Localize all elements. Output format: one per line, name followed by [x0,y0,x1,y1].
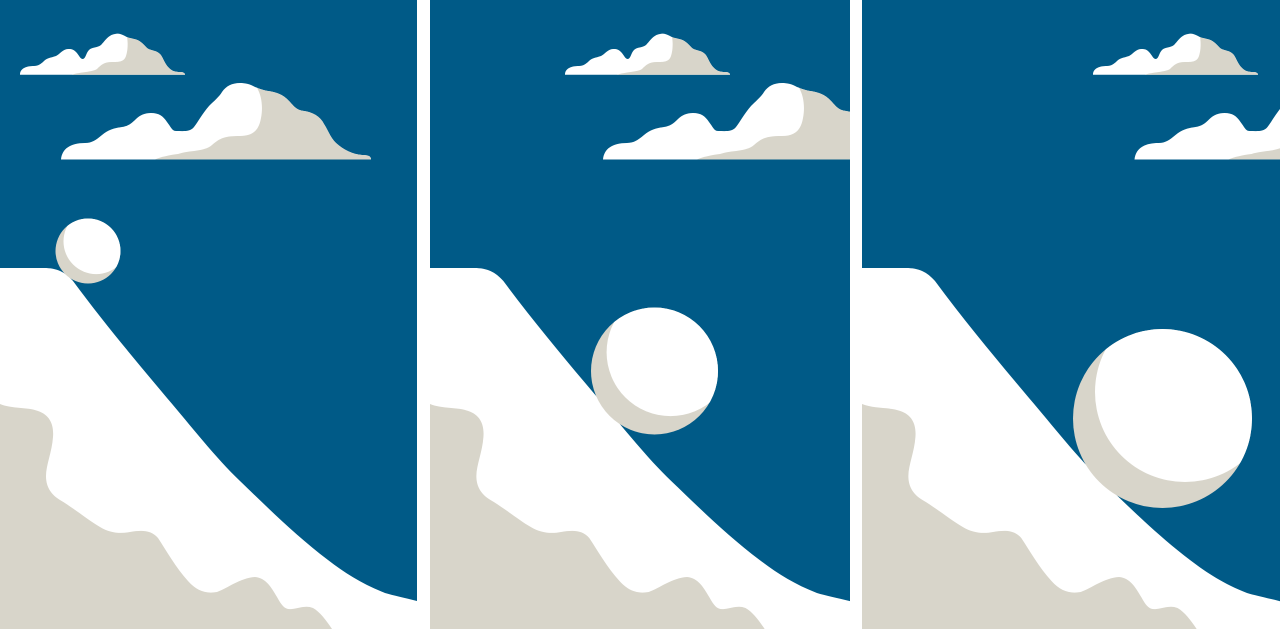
exposed rock [430,404,765,629]
sky [430,0,850,629]
small cloud [1093,34,1258,75]
large snowball [1073,329,1252,508]
small cloud [565,34,730,75]
panel: small snowball at hilltop [0,0,425,629]
large cloud [1134,109,1280,160]
exposed rock [0,404,332,629]
snowy hill [430,268,857,629]
sky [0,0,417,629]
small cloud [20,34,185,75]
snowy hill [0,268,425,629]
panel: large snowball lower slope [862,0,1280,629]
snowy hill [862,268,1280,629]
exposed rock [862,404,1197,629]
medium snowball [591,308,718,434]
panel: medium snowball mid slope [430,0,850,629]
sky [862,0,1280,629]
large cloud [61,83,371,160]
large cloud [603,83,850,160]
small snowball [56,218,120,284]
